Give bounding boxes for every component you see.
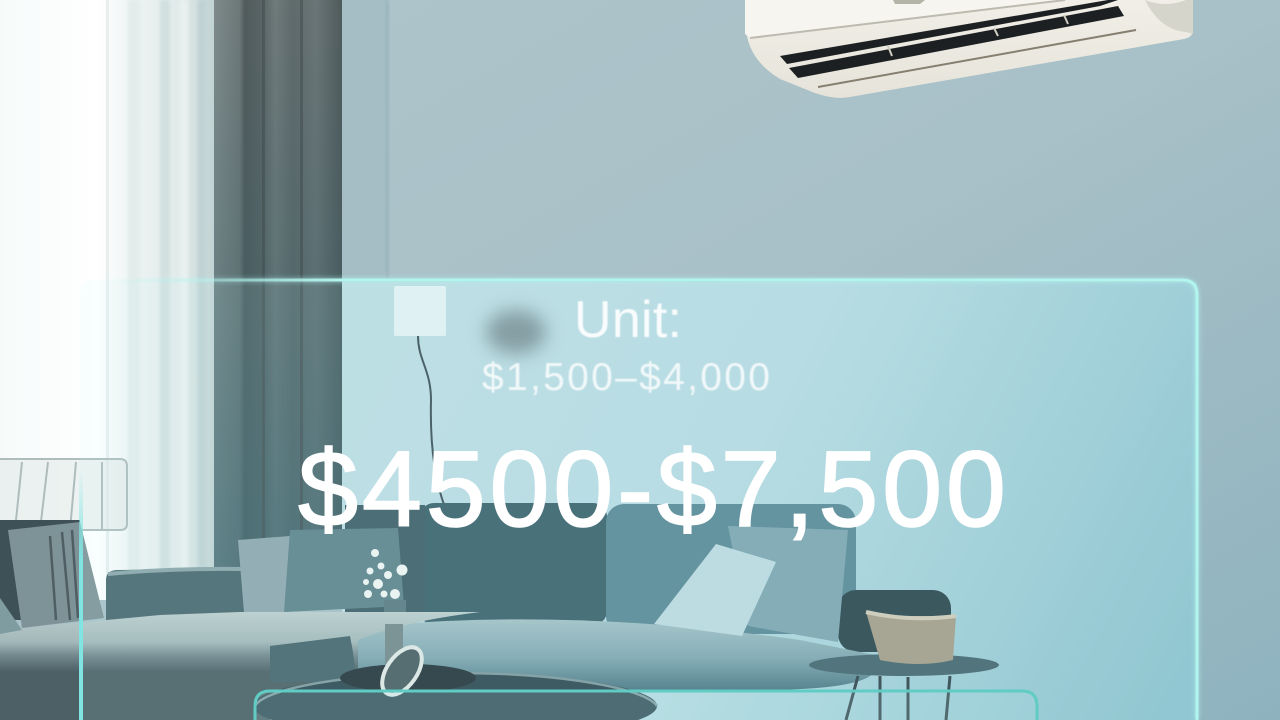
heading: unit: Unit: [574,291,682,349]
small left cushion [0,598,22,634]
total price range: $4500-$7,500 [298,428,1006,549]
main glass panel [80,280,1197,720]
large teal cushion [284,528,404,612]
seat left [0,612,480,720]
cushions [0,522,848,642]
grey cushion [238,536,290,612]
back cushion: dark centre [420,503,607,625]
right arm [838,590,951,652]
seat right [352,619,875,690]
pale cushion [654,544,776,636]
window with sheer curtains [0,0,216,600]
left arm [106,568,245,622]
seat centre front [270,636,356,682]
textured right cushion [728,526,848,642]
floor lamp [394,286,446,510]
dark curtain [214,0,342,570]
dark back behind cushion [345,505,425,620]
air conditioner unit [745,0,1193,98]
blurred icon [486,310,546,354]
unit price range: $1,500–$4,000 [482,356,770,399]
striped cushion [8,522,104,628]
side table with basket [809,612,999,720]
back cushion: right [606,504,856,634]
flowers in vase [363,549,408,612]
wall seen through glass panel [342,282,1197,720]
lower glass panel [255,691,1037,720]
wall corner [342,0,389,280]
coffee table with ornament [253,624,657,720]
glass radiator at window [0,459,127,530]
left back [0,520,80,620]
sofa [0,503,951,720]
